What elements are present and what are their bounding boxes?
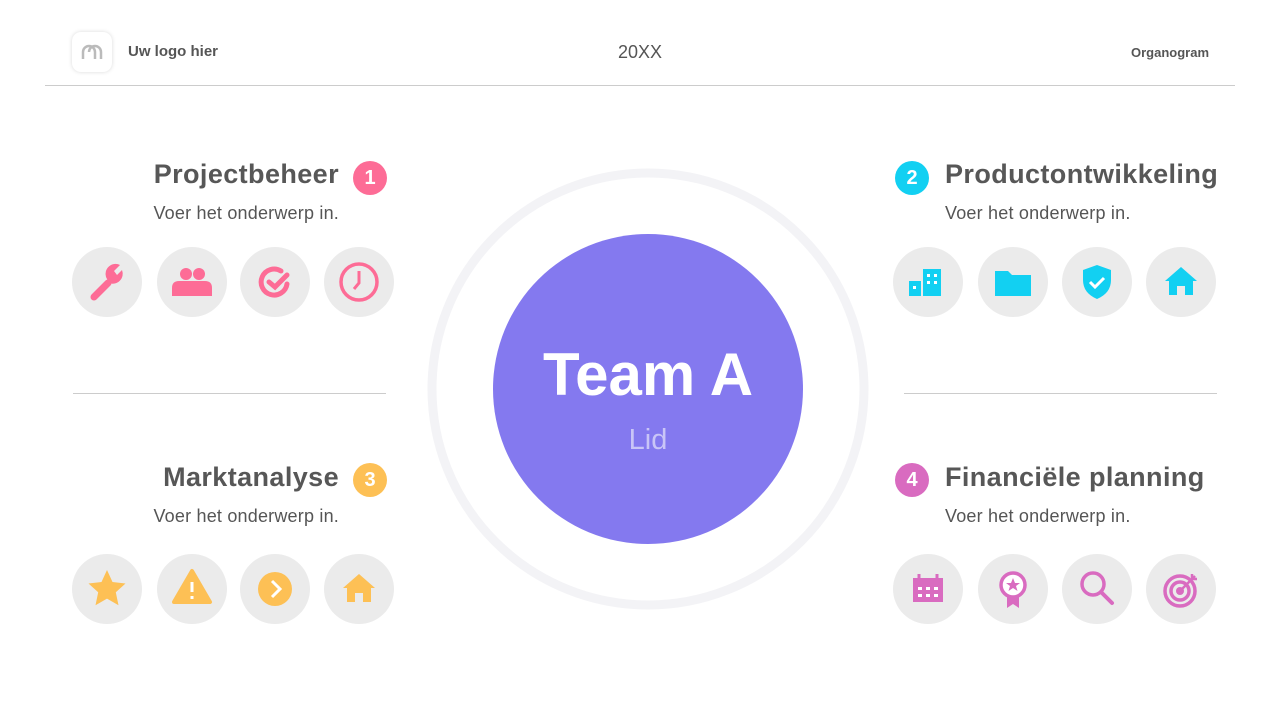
year: 20XX [618, 42, 662, 62]
center: Team A [428, 168, 868, 610]
panel: Marktanalyse [72, 462, 394, 624]
logo box [72, 32, 112, 72]
badge 3 [353, 463, 387, 497]
logo text: Uw logo hier [128, 43, 218, 60]
subtitle: Voer het onderwerp in. [153, 203, 339, 223]
icons [893, 247, 1216, 317]
heading: Projectbeheer [154, 159, 339, 189]
badge 2 [895, 161, 929, 195]
header label: Organogram [1131, 45, 1209, 60]
icons [72, 554, 394, 624]
heading: Productontwikkeling [945, 159, 1218, 189]
subtitle: Voer het onderwerp in. [945, 203, 1131, 223]
heading: Financiële planning [945, 462, 1205, 492]
center: Team A: Team A [543, 341, 753, 408]
center: Team A: Lid [629, 424, 667, 456]
badge 2: 2 [906, 167, 918, 189]
icons [72, 247, 394, 317]
subtitle: Voer het onderwerp in. [153, 506, 339, 526]
badge 1: 1 [364, 167, 376, 189]
panel: Projectbeheer [72, 159, 394, 317]
heading: Marktanalyse [163, 462, 339, 492]
panel: Financiële planning [893, 462, 1216, 624]
badge 1 [353, 161, 387, 195]
badge 3: 3 [364, 469, 376, 491]
badge 4 [895, 463, 929, 497]
badge 4: 4 [906, 469, 918, 491]
panel: Productontwikkeling [893, 159, 1218, 317]
subtitle: Voer het onderwerp in. [945, 506, 1131, 526]
icons [893, 554, 1216, 624]
